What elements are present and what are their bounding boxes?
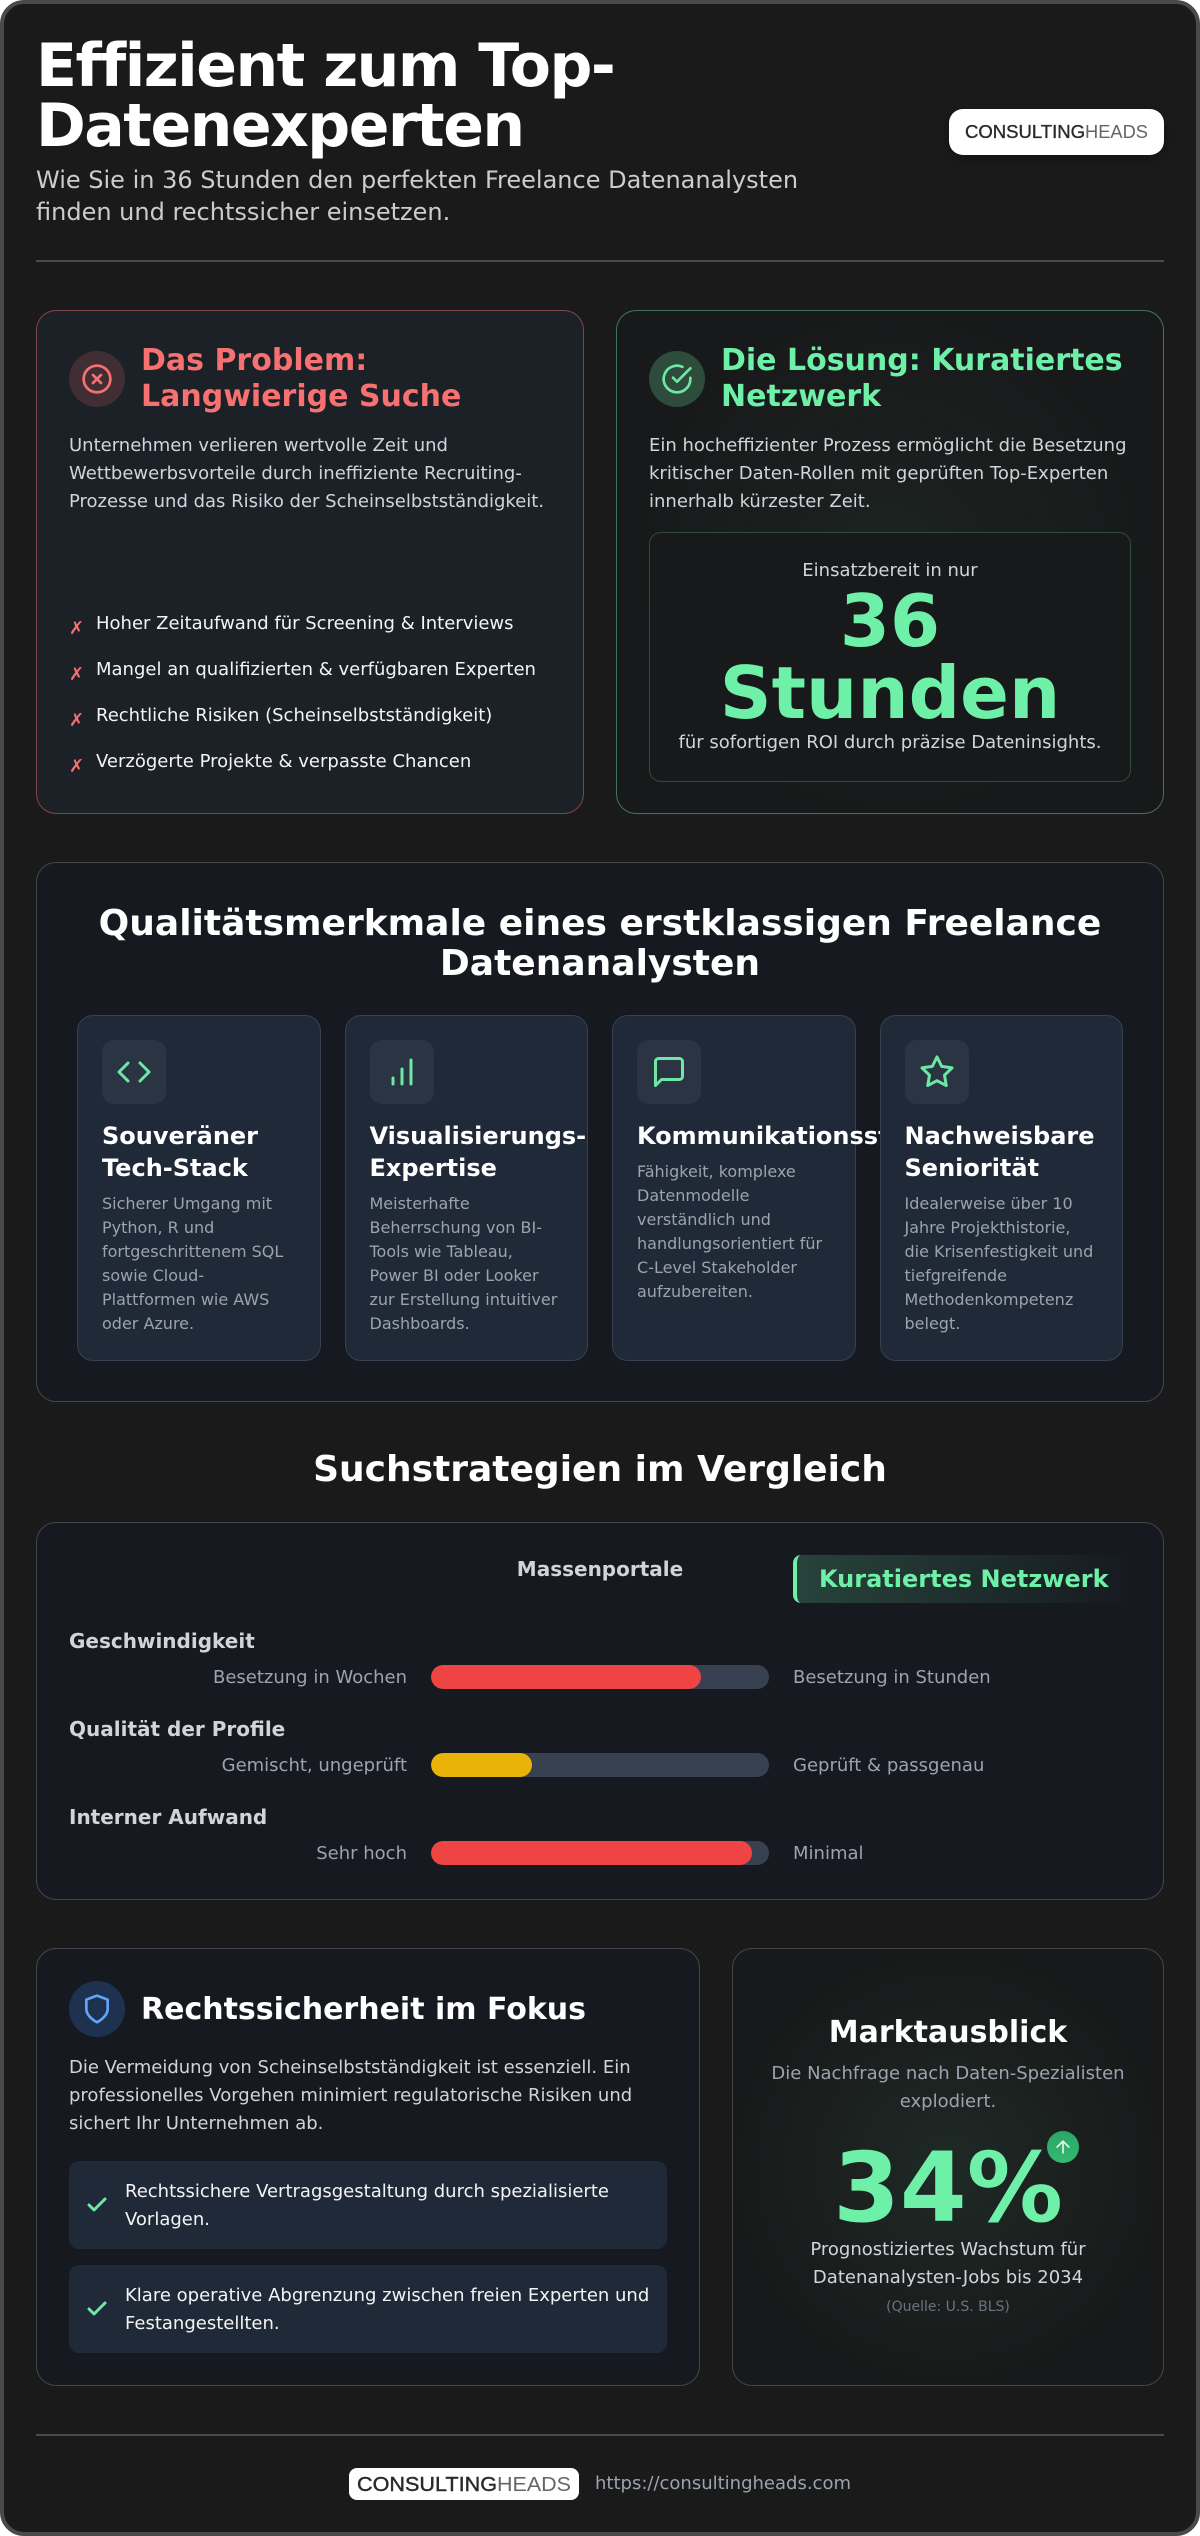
column header: Massenportale: Massenportale: [517, 1557, 683, 1581]
icon: solution check-circle: [649, 351, 705, 407]
left label: Sehr hoch: Sehr hoch: [316, 1843, 407, 1864]
feature text: Datenmodelle: [637, 1186, 750, 1205]
right label: Besetzung in Stunden: Besetzung in Stunden: [793, 1667, 991, 1688]
right label: Geprüft & passgenau: Geprüft & passgenau: [793, 1755, 984, 1776]
right label: Minimal: Minimal: [793, 1843, 864, 1864]
text: growth note: Prognostiziertes Wachstum für: [810, 2239, 1086, 2260]
heading: solution: [721, 343, 1123, 414]
subtitle: [36, 166, 798, 226]
feature title: Nachweisbare: [904, 1122, 1095, 1150]
list item: ✗: [69, 710, 84, 731]
panel: quality features: [36, 862, 1164, 1402]
feature text: Beherrschung von BI-: [370, 1218, 542, 1237]
feature text: Idealerweise über 10: [904, 1194, 1073, 1213]
feature text: [637, 1162, 822, 1301]
footer logo: CONSULTING: [357, 2474, 497, 2496]
callout note: für sofortigen ROI durch präzise Dateninsights.: [679, 732, 1101, 753]
feature text: Meisterhafte: [370, 1194, 470, 1213]
feature text: Jahre Projekthistorie,: [904, 1218, 1070, 1237]
list item: ✗: [69, 664, 84, 685]
feature card: visualisation: [344, 1015, 588, 1361]
feature text: tiefgreifende: [904, 1266, 1007, 1285]
feature text: aufzubereiten.: [637, 1282, 753, 1301]
footer: [349, 2468, 851, 2500]
feature title: Expertise: [370, 1154, 497, 1182]
list item: ✗: [69, 756, 84, 777]
legal point 1: Vorlagen.: [125, 2209, 210, 2230]
feature text: Dashboards.: [370, 1314, 470, 1333]
legal point 2: Klare operative Abgrenzung zwischen freien Experten und: [125, 2285, 649, 2306]
text: legal description: sichert Ihr Unternehmen ab.: [69, 2113, 323, 2134]
row label: Geschwindigkeit: Geschwindigkeit: [69, 1629, 255, 1653]
callout: 36 Stunden: [649, 532, 1131, 782]
text: solution description: [649, 435, 1127, 512]
feature text: belegt.: [904, 1314, 960, 1333]
panel: problem: [36, 310, 584, 814]
feature text: sowie Cloud-: [102, 1266, 204, 1285]
feature text: handlungsorientiert für: [637, 1234, 822, 1253]
panel: comparison: [36, 1522, 1164, 1900]
list item: Verzögerte Projekte & verpasste Chancen: [96, 751, 471, 772]
bar: 95 percent: [431, 1841, 769, 1865]
logo: Consulting Heads: CONSULTING: [965, 122, 1085, 142]
title: [36, 31, 614, 161]
big number: 34 percent: 34%: [833, 2132, 1063, 2244]
footer logo: [349, 2468, 579, 2500]
legal point 2: [69, 2265, 667, 2353]
icon: message: [637, 1040, 701, 1104]
legal point 1: Rechtssichere Vertragsgestaltung durch spezialisierte: [125, 2181, 609, 2202]
feature card: seniority: [880, 1015, 1123, 1361]
text: problem description: Prozesse und das Risiko der Scheinselbstständigkeit.: [69, 491, 544, 512]
feature title: Seniorität: [904, 1154, 1039, 1182]
left label: Gemischt, ungeprüft: Gemischt, ungeprüft: [222, 1755, 407, 1776]
icon: problem x-circle: [69, 351, 125, 407]
panel: legal: [36, 1948, 700, 2386]
legal point 2: Festangestellten.: [125, 2313, 280, 2334]
feature text: fortgeschrittenem SQL: [102, 1242, 283, 1261]
feature text: zur Erstellung intuitiver: [370, 1290, 557, 1309]
heading: solution: Die Lösung: Kuratiertes: [721, 343, 1123, 378]
icon: code: [102, 1040, 166, 1104]
icon: star: [904, 1040, 968, 1104]
text: problem description: Wettbewerbsvorteile durch ineffiziente Recruiting-: [69, 463, 522, 484]
heading: problem: Langwierige Suche: [141, 379, 461, 414]
left label: Besetzung in Wochen: Besetzung in Wochen: [213, 1667, 407, 1688]
text: market description: Die Nachfrage nach Daten-Spezialisten: [771, 2063, 1125, 2084]
heading: quality features: Qualitätsmerkmale eines erstklassigen Freelance: [99, 903, 1101, 944]
heading: solution: Netzwerk: [721, 379, 881, 414]
bar: 80 percent: [431, 1665, 769, 1689]
subtitle: Wie Sie in 36 Stunden den perfekten Freelance Datenanalysten: [36, 166, 798, 194]
row label: Interner Aufwand: Interner Aufwand: [69, 1805, 267, 1829]
feature title: [904, 1122, 1095, 1182]
text: legal description: Die Vermeidung von Scheinselbstständigkeit ist essenziell. Ein: [69, 2057, 631, 2078]
footer url: https://consultingheads.com: [595, 2473, 851, 2494]
feature card: tech stack: [77, 1015, 320, 1361]
text: solution description: innerhalb kürzester Zeit.: [649, 491, 871, 512]
feature title: [370, 1122, 586, 1182]
feature title: Visualisierungs-: [370, 1122, 586, 1150]
text: market description: explodiert.: [900, 2091, 996, 2112]
row label: Qualität der Profile: Qualität der Profile: [69, 1717, 285, 1741]
feature text: die Krisenfestigkeit und: [904, 1242, 1093, 1261]
panel: solution: [616, 310, 1164, 814]
icon: bar chart: [370, 1040, 434, 1104]
list item: Mangel an qualifizierten & verfügbaren Experten: [96, 659, 536, 680]
heading: problem: [141, 343, 461, 414]
source: (Quelle: U.S. BLS): [886, 2299, 1010, 2315]
feature text: Methodenkompetenz: [904, 1290, 1073, 1309]
header: [36, 31, 1164, 226]
heading: market outlook: Marktausblick: [829, 2015, 1067, 2050]
feature text: [369, 1194, 558, 1333]
heading: comparison: Suchstrategien im Vergleich: [313, 1449, 887, 1490]
feature title: [102, 1122, 258, 1182]
text: legal description: professionelles Vorgehen minimiert regulatorische Risiken und: [69, 2085, 632, 2106]
bar: 30 percent: [431, 1753, 769, 1777]
heading: problem: Das Problem:: [141, 343, 367, 378]
text: growth note: [810, 2239, 1086, 2288]
feature title: Souveräner: [102, 1122, 258, 1150]
text: problem description: Unternehmen verlieren wertvolle Zeit und: [69, 435, 448, 456]
list item: Hoher Zeitaufwand für Screening & Interviews: [96, 613, 514, 634]
panel: market outlook: [732, 1948, 1164, 2386]
feature text: [102, 1194, 284, 1333]
feature text: Sicherer Umgang mit: [102, 1194, 272, 1213]
feature text: Python, R und: [102, 1218, 214, 1237]
feature card: communication: [612, 1015, 856, 1361]
column header: Kuratiertes Netzwerk: [793, 1555, 1131, 1603]
text: growth note: Datenanalysten-Jobs bis 2034: [813, 2267, 1083, 2288]
text: market description: [771, 2063, 1125, 2112]
list: problem points: [69, 613, 536, 777]
feature text: oder Azure.: [102, 1314, 194, 1333]
list item: Rechtliche Risiken (Scheinselbstständigkeit): [96, 705, 492, 726]
subtitle: finden und rechtssicher einsetzen.: [36, 198, 450, 226]
heading: legal: Rechtssicherheit im Fokus: [141, 1992, 586, 2027]
feature title: Kommunikationsstärke: [637, 1122, 949, 1150]
callout intro: Einsatzbereit in nur: [802, 560, 978, 581]
big number: Stunden: [720, 651, 1060, 735]
text: problem description: [69, 435, 544, 512]
title: Effizient zum Top-: [36, 31, 614, 101]
feature text: verständlich und: [637, 1210, 771, 1229]
title: Datenexperten: [36, 91, 524, 161]
logo: Consulting Heads: [949, 109, 1164, 155]
big number: [720, 579, 1060, 735]
column header: Kuratiertes Netzwerk: Kuratiertes Netzwerk: [819, 1565, 1109, 1593]
big number: 36: [840, 579, 940, 663]
feature text: [904, 1194, 1093, 1333]
legal point 1: [69, 2161, 667, 2249]
list item: ✗: [69, 618, 84, 639]
heading: quality features: Datenanalysten: [440, 943, 760, 984]
text: legal description: [69, 2057, 632, 2134]
feature text: Tools wie Tableau,: [370, 1242, 513, 1261]
heading: quality features: [99, 903, 1101, 984]
text: solution description: Ein hocheffizienter Prozess ermöglicht die Besetzung: [649, 435, 1127, 456]
footer logo: HEADS: [497, 2474, 571, 2496]
icon: growth arrow: [1047, 2131, 1079, 2163]
feature text: Plattformen wie AWS: [102, 1290, 269, 1309]
logo: Consulting Heads: HEADS: [1085, 122, 1148, 142]
feature title: Tech-Stack: [102, 1154, 248, 1182]
text: solution description: kritischer Daten-Rollen mit geprüften Top-Experten: [649, 463, 1108, 484]
feature text: Fähigkeit, komplexe: [637, 1162, 796, 1181]
feature text: C-Level Stakeholder: [637, 1258, 797, 1277]
icon: shield: [69, 1981, 125, 2037]
feature text: Power BI oder Looker: [370, 1266, 539, 1285]
